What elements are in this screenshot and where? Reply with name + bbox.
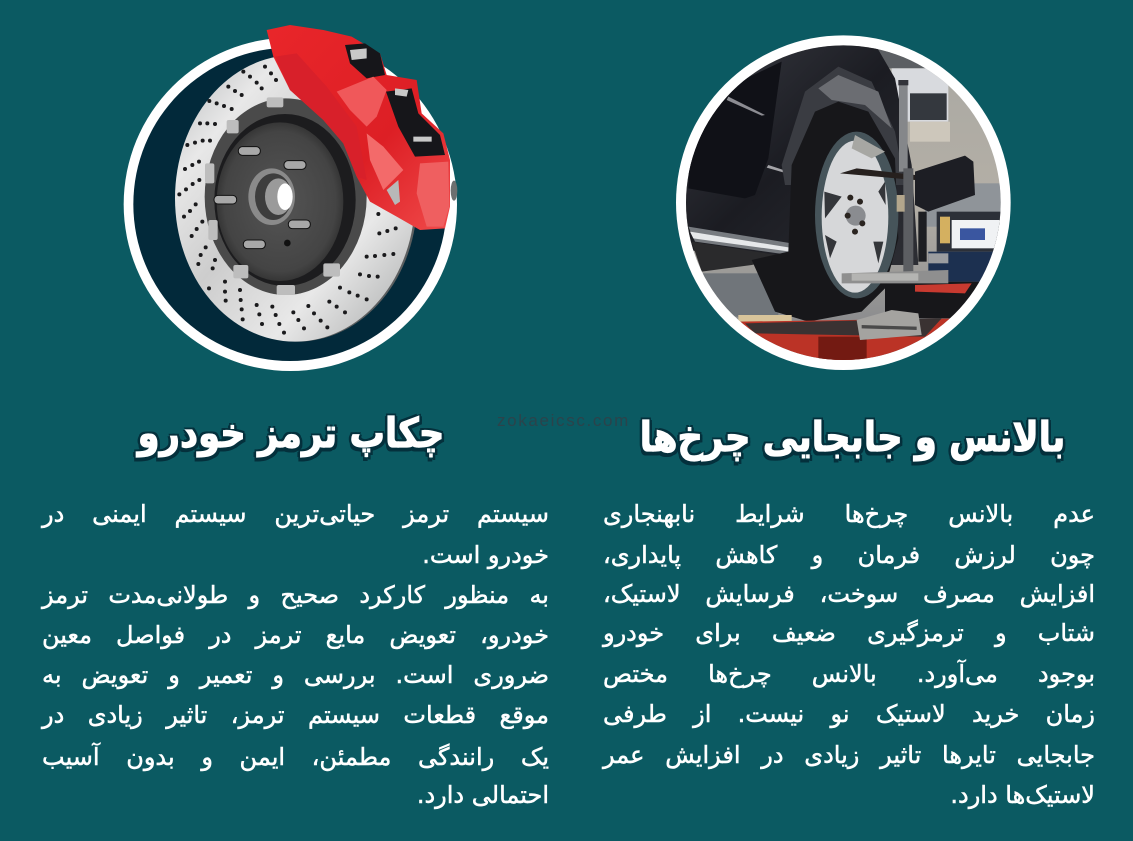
text block: brake check: ضروری است. بررسی و تعمیر و تعویض به — [42, 661, 549, 689]
text block: wheel balance: زمان خرید لاستیک نو نیست. از طرفی — [603, 700, 1095, 728]
heading: right column: بالانس و جابجایی چرخ‌ها — [640, 415, 1065, 461]
text block: wheel balance: چون لرزش فرمان و کاهش پایداری، — [603, 541, 1095, 569]
text block: wheel balance: لاستیک‌ها دارد. — [950, 781, 1095, 809]
text block: wheel balance: شتاب و ترمزگیری ضعیف برای خودرو — [603, 619, 1095, 647]
heading: left column: چکاپ ترمز خودرو — [138, 411, 444, 457]
text block: wheel balance: عدم بالانس چرخ‌ها شرایط نابهنجاری — [603, 500, 1095, 528]
text block: brake check: به منظور کارکرد صحیح و طولانی‌مدت ترمز — [42, 581, 549, 609]
text block: brake check — [40, 500, 549, 810]
text block: wheel balance — [602, 500, 1095, 810]
text block: brake check: سیستم ترمز حیاتی‌ترین سیستم ایمنی در — [42, 500, 549, 528]
text block: brake check: خودرو است. — [422, 541, 549, 569]
illustration: brake disc and red caliper in circle — [124, 25, 457, 371]
watermark: zokaeicsc.com — [497, 411, 630, 430]
illustration: wheel alignment photo in circle — [676, 35, 1011, 372]
text block: wheel balance: جابجایی تایرها تاثیر زیادی در افزایش عمر — [603, 741, 1095, 769]
text block: brake check: خودرو، تعویض مایع ترمز در فواصل معین — [42, 621, 549, 649]
text block: wheel balance: افزایش مصرف سوخت، فرسایش لاستیک، — [603, 580, 1095, 608]
text block: brake check: یک رانندگی مطمئن، ایمن و بدون آسیب — [42, 743, 549, 771]
text block: brake check: موقع قطعات سیستم ترمز، تاثیر زیادی در — [42, 701, 549, 729]
text block: wheel balance: بوجود می‌آورد. بالانس چرخ‌ها مختص — [603, 660, 1095, 688]
text block: brake check: احتمالی دارد. — [417, 781, 549, 809]
